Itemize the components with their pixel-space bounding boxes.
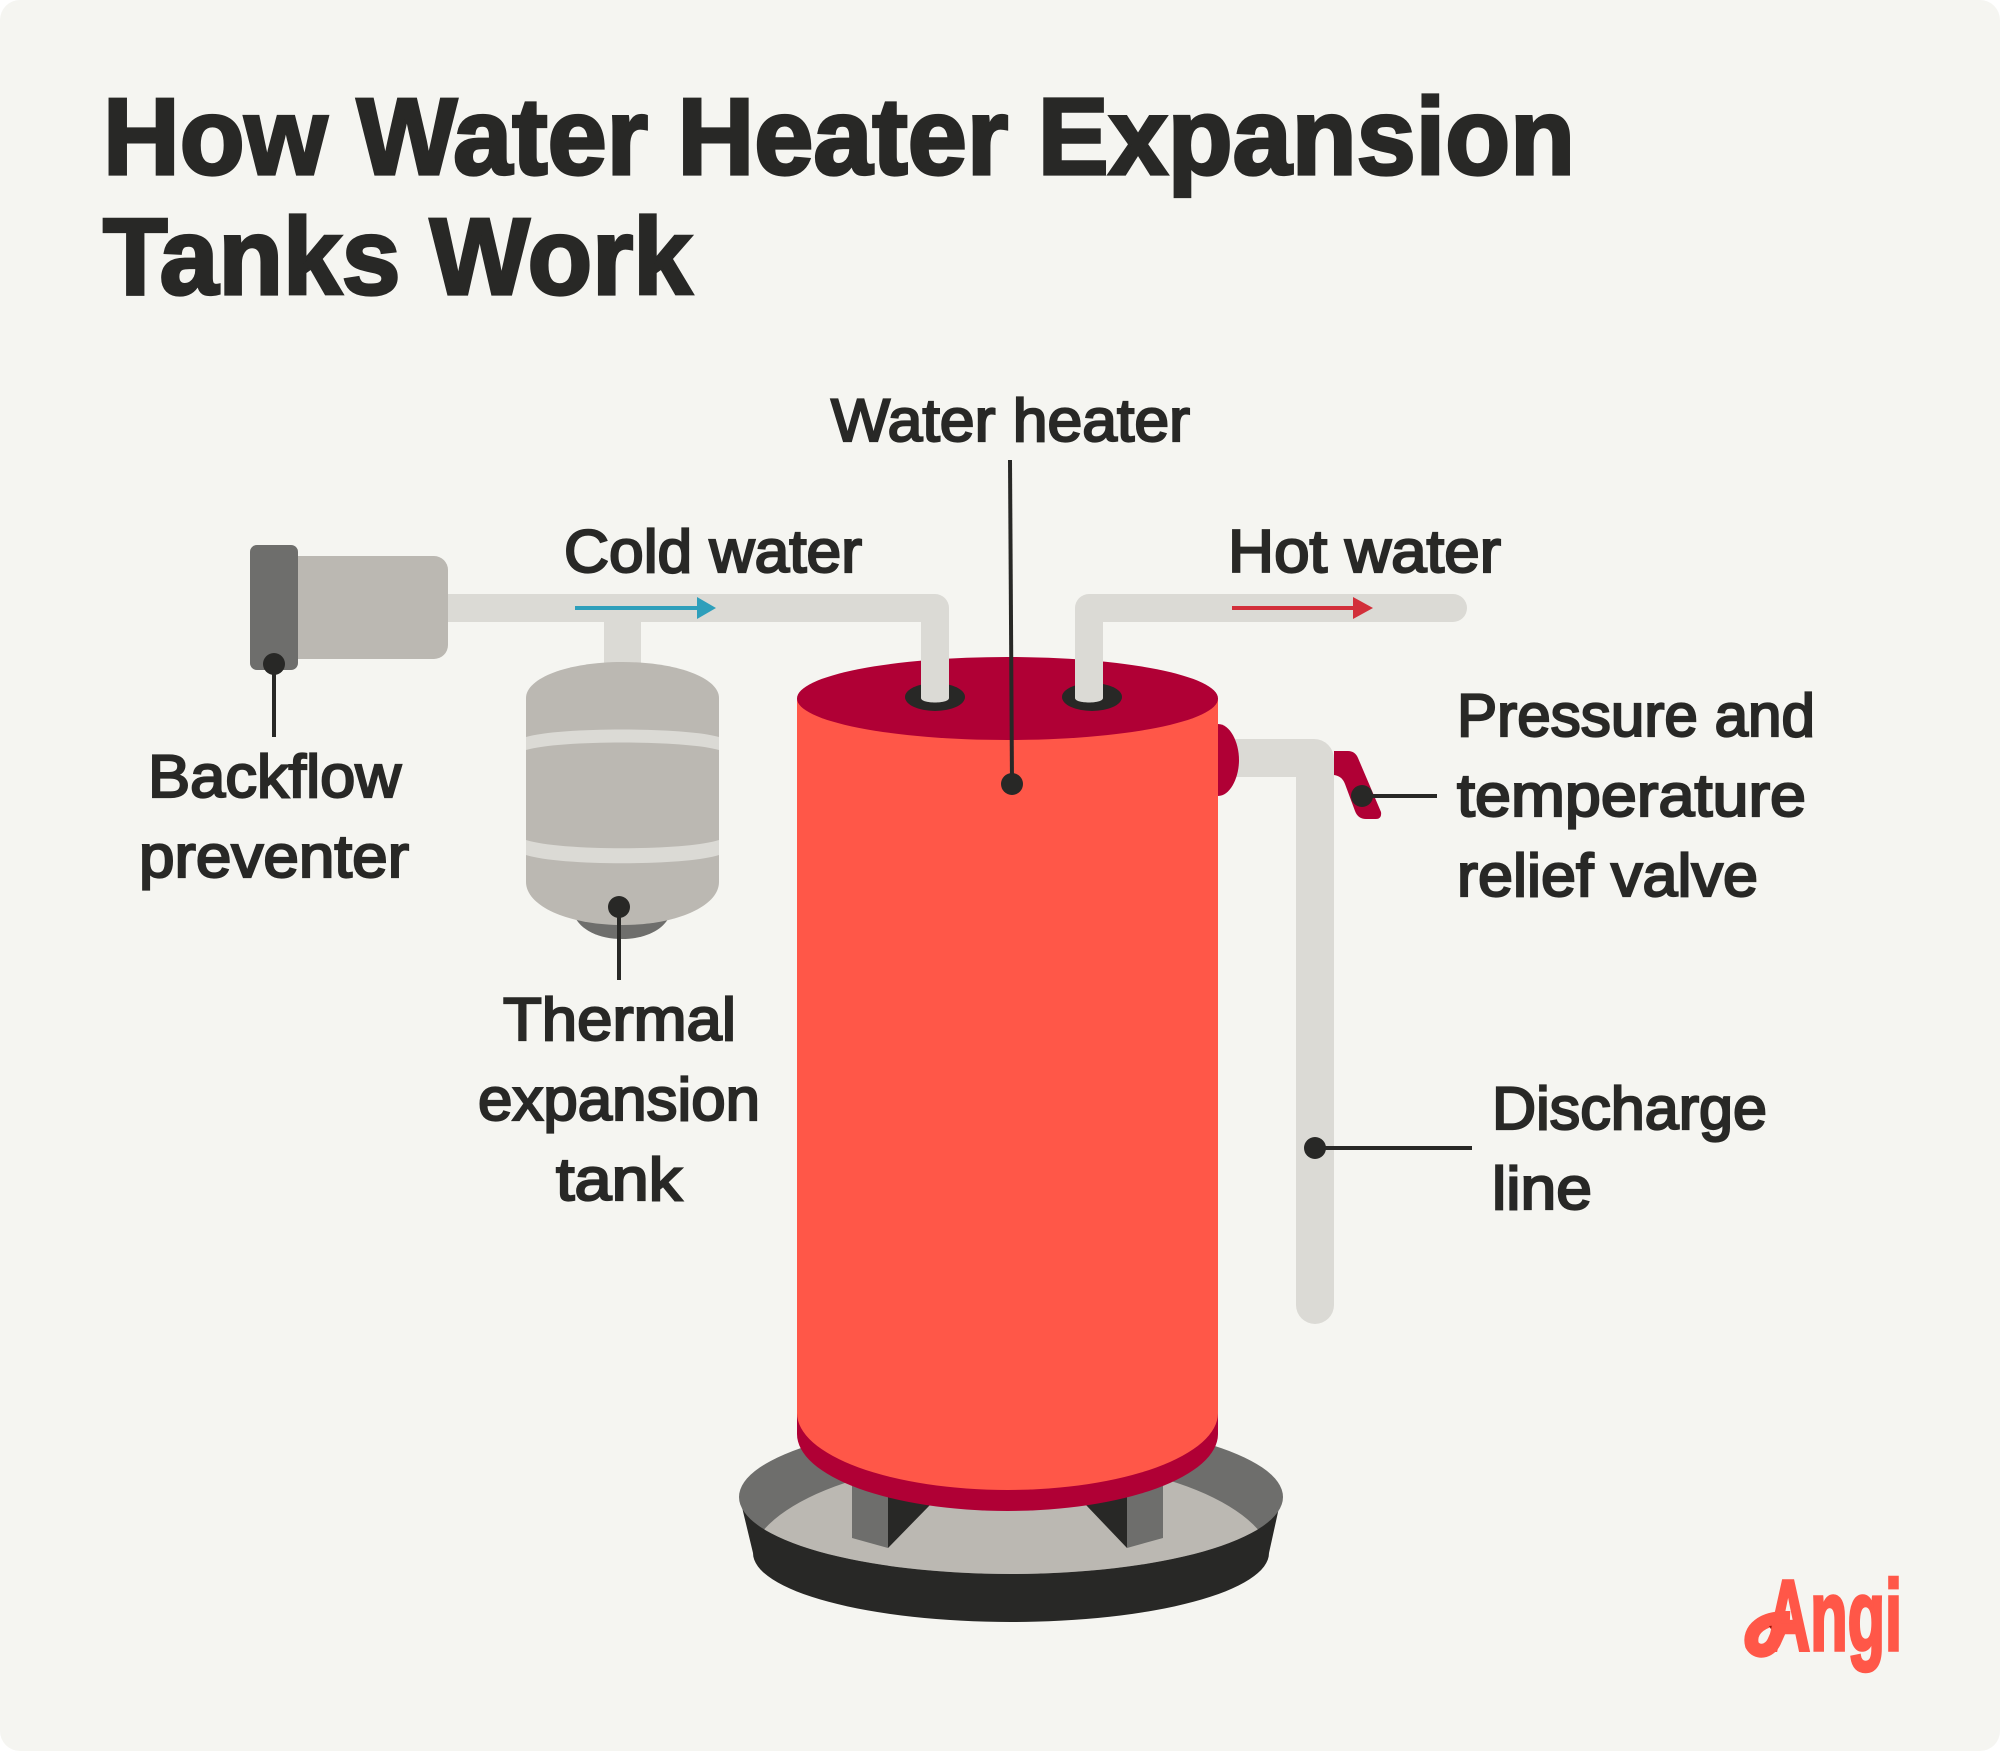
cold water pipe: [448, 594, 949, 702]
label: backflow preventer: preventer: [139, 823, 409, 890]
label: backflow preventer: Backflow: [148, 743, 402, 810]
title: Tanks Work: [103, 196, 692, 318]
label: water heater: Water heater: [831, 387, 1190, 454]
label: pressure and temperature relief valve: temperature: [1457, 762, 1806, 829]
title: [103, 76, 1575, 318]
icon: thermal expansion tank: [526, 662, 719, 939]
label: thermal expansion tank: expansion: [478, 1066, 760, 1133]
label: backflow preventer: [139, 653, 409, 890]
arrow: hot water: [1232, 597, 1373, 619]
label: thermal expansion tank: tank: [556, 1146, 683, 1213]
icon: water heater body: [797, 657, 1218, 1511]
cold inlet pipe overlay: [921, 622, 949, 702]
label: pressure and temperature relief valve: relief valve: [1457, 842, 1758, 909]
label: discharge line: [1304, 1075, 1767, 1222]
hot water pipe: [1075, 594, 1467, 702]
label: thermal expansion tank: [478, 896, 760, 1213]
label: hot water: Hot water: [1228, 518, 1501, 585]
label: water heater: [831, 387, 1190, 795]
label: thermal expansion tank: Thermal: [503, 986, 736, 1053]
label: cold water: Cold water: [564, 518, 862, 585]
logo: Angi: Angi: [1766, 1560, 1902, 1672]
label: pressure and temperature relief valve: [1351, 682, 1815, 909]
label: pressure and temperature relief valve: Pressure and: [1457, 682, 1815, 749]
arrow: cold water: [575, 597, 716, 619]
title: How Water Heater Expansion: [103, 76, 1575, 198]
icon: relief valve flange: [1218, 724, 1239, 796]
discharge line: [1225, 739, 1334, 1324]
logo: Angi: [1751, 1560, 1902, 1672]
label: discharge line: line: [1492, 1155, 1592, 1222]
icon: relief valve handle: [1334, 751, 1381, 819]
icon: burner base: [739, 1446, 1283, 1622]
label: discharge line: Discharge: [1492, 1075, 1767, 1142]
icon: backflow preventer: [250, 545, 448, 670]
